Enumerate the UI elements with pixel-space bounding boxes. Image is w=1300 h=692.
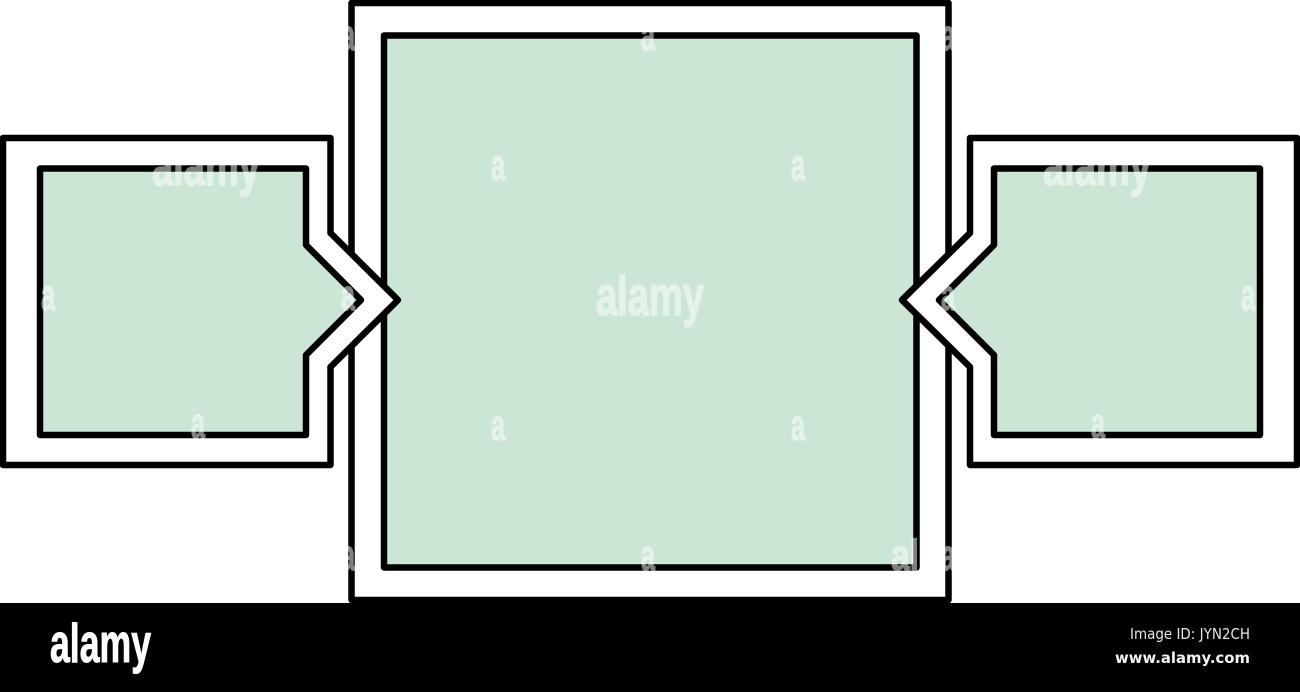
watermarks: a <box>341 11 355 60</box>
watermarks: a <box>1241 271 1255 320</box>
website: www.alamy.com <box>1115 649 1250 667</box>
footer logo: alamy <box>50 612 151 674</box>
panel: left <box>3 138 398 465</box>
watermarks: a <box>491 401 505 450</box>
left panel outer frame with arrow <box>3 138 398 465</box>
watermarks: a <box>641 11 655 60</box>
right panel green box with arrow <box>939 168 1260 435</box>
watermarks: a <box>341 531 355 580</box>
watermarks: a <box>941 531 955 580</box>
watermarks: a <box>41 271 55 320</box>
watermarks: a <box>341 271 355 320</box>
panel: centre <box>352 3 948 600</box>
watermarks: a <box>491 141 505 190</box>
centre panel green box <box>384 36 916 568</box>
footer band <box>0 603 1300 692</box>
watermarks: al <box>891 531 919 580</box>
panel: right <box>902 138 1297 465</box>
watermarks: a <box>791 401 805 450</box>
watermarks: a <box>941 11 955 60</box>
right panel outer frame with arrow <box>902 138 1297 465</box>
watermarks: alamy <box>152 134 260 197</box>
watermarks: alamy <box>1043 134 1151 197</box>
watermarks: a <box>1091 399 1105 448</box>
watermarks <box>41 11 1255 580</box>
image id: Image ID: JYN2CH <box>1130 625 1250 643</box>
centre panel outer frame <box>352 3 948 600</box>
watermarks: alamy <box>596 264 704 327</box>
left panel green box with arrow <box>40 168 361 435</box>
watermarks: a <box>641 531 655 580</box>
watermarks: a <box>941 271 955 320</box>
watermarks: a <box>791 141 805 190</box>
watermarks: a <box>191 399 205 448</box>
